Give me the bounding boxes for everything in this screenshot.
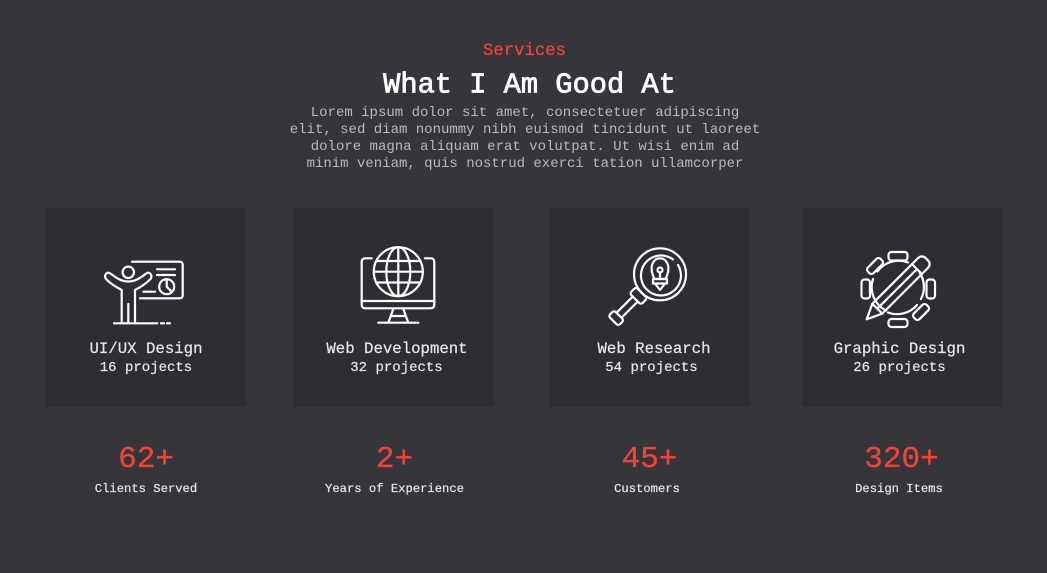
project count: 26 projects xyxy=(853,360,946,376)
stat: design items: Design Items xyxy=(855,482,943,496)
stat: customers: Customers xyxy=(614,482,680,496)
project count: 54 projects xyxy=(605,360,698,376)
project count: 16 projects xyxy=(100,360,192,376)
stat: clients served xyxy=(95,442,197,496)
stat: years of experience: Years of Experience xyxy=(325,482,464,496)
intro paragraph: elit, sed diam nonummy nibh euismod tincidunt ut laoreet xyxy=(290,122,760,138)
stat: design items: 320+ xyxy=(864,442,939,477)
panel: UI/UX Design xyxy=(46,208,246,407)
heading: Web Development xyxy=(326,340,468,358)
panel: Web Research xyxy=(550,208,750,407)
intro paragraph: minim veniam, quis nostrud exerci tation ullamcorper xyxy=(307,156,743,172)
heading: Web Research xyxy=(598,340,710,358)
stat: customers: 45+ xyxy=(622,442,677,477)
stat: clients served: 62+ xyxy=(118,442,174,477)
intro paragraph: Lorem ipsum dolor sit amet, consectetuer adipiscing xyxy=(311,105,739,121)
panel: Graphic Design xyxy=(802,208,1002,407)
intro paragraph xyxy=(290,105,760,172)
icon: gear and pencil xyxy=(862,252,935,327)
intro paragraph: dolore magna aliquam erat volutpat. Ut wisi enim ad xyxy=(311,139,739,155)
stat: customers xyxy=(614,442,680,496)
heading: Graphic Design xyxy=(834,340,965,358)
icon: globe on monitor xyxy=(362,247,434,323)
stat: design items xyxy=(855,442,943,496)
heading: UI/UX Design xyxy=(90,340,202,358)
stat: years of experience xyxy=(325,442,464,496)
stat: years of experience: 2+ xyxy=(376,442,413,477)
panel: Web Development xyxy=(294,208,494,407)
icon: presenter at board xyxy=(105,262,183,323)
stat: clients served: Clients Served xyxy=(95,482,197,496)
project count: 32 projects xyxy=(350,360,443,376)
title: What I Am Good At xyxy=(383,68,676,102)
section label: Services xyxy=(483,42,566,61)
icon: magnifier with light bulb xyxy=(608,248,686,327)
